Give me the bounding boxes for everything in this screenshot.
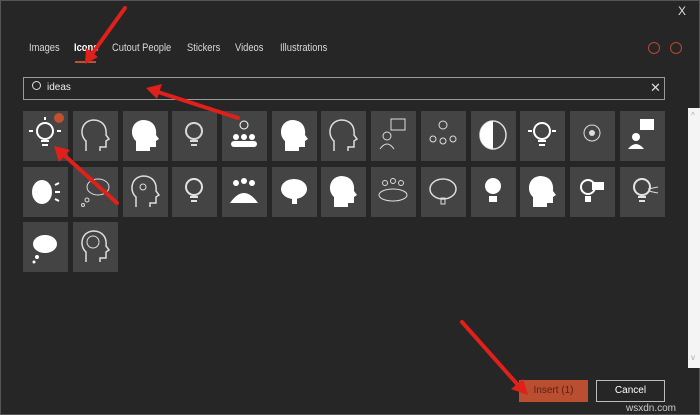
search box <box>23 77 665 100</box>
arrow: to selected icon <box>54 146 117 203</box>
tiles row 3 <box>23 222 68 272</box>
feedback icons <box>648 42 682 54</box>
tabs: Illustrations <box>280 42 327 54</box>
tiles row 1 <box>23 111 68 161</box>
scrollbar <box>688 108 700 368</box>
icon grid <box>23 111 665 272</box>
scrollbar: v <box>691 353 695 362</box>
arrow: to insert button <box>462 322 528 395</box>
search box: ideas <box>47 82 71 93</box>
cancel button <box>596 380 665 402</box>
insert button <box>519 380 588 402</box>
arrow: to Icons tab <box>85 8 125 64</box>
tabs: Icons <box>74 42 98 54</box>
close button: X <box>678 4 686 18</box>
tabs <box>29 42 327 63</box>
tabs: Images <box>29 42 60 54</box>
insert button: Insert (1) <box>533 385 574 396</box>
search box: ✕ <box>650 80 661 95</box>
tiles row 2 <box>23 167 68 217</box>
tabs: Videos <box>235 42 263 54</box>
arrow: to search text <box>146 84 238 118</box>
scrollbar: ^ <box>691 111 695 120</box>
watermark: wsxdn.com <box>626 403 676 414</box>
tabs: Cutout People <box>112 42 171 54</box>
cancel button: Cancel <box>615 385 646 396</box>
tabs: Stickers <box>187 42 220 54</box>
